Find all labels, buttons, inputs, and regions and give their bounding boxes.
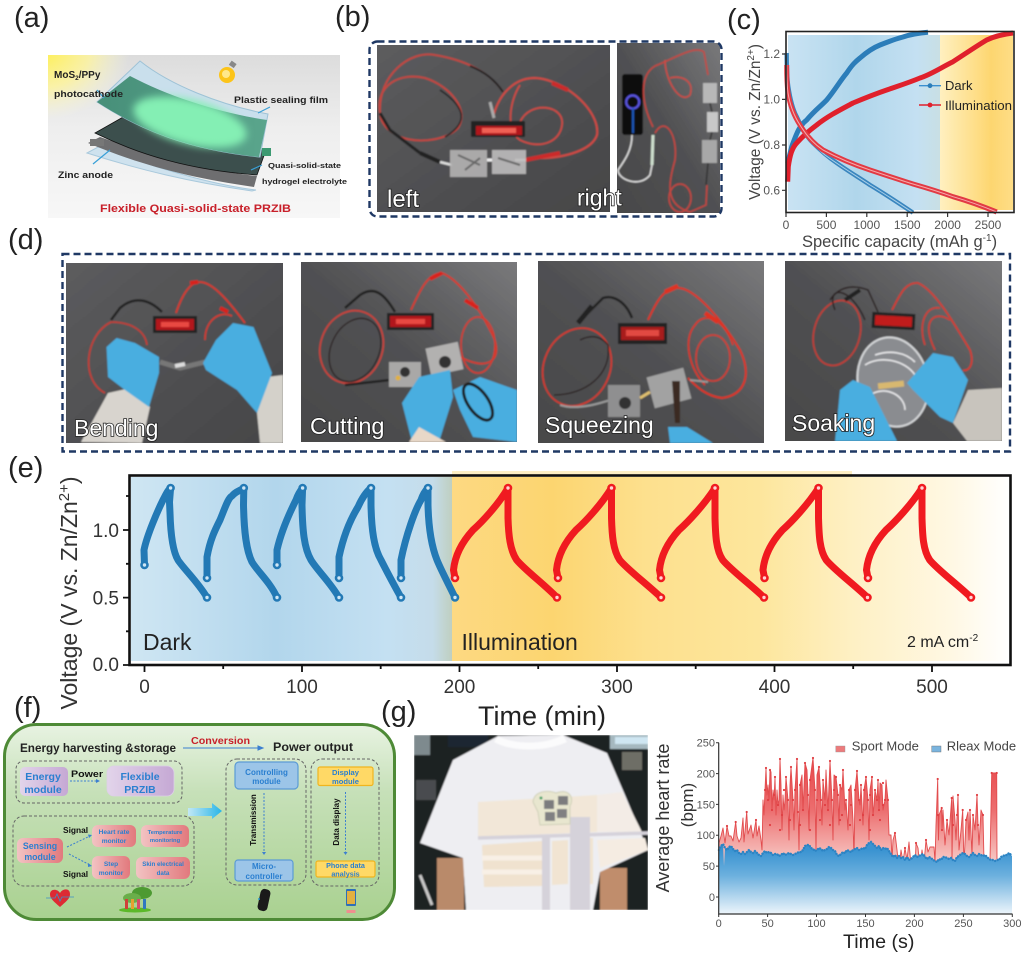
y tick labels: 100 [697,830,715,842]
icon: runners under tree [119,887,152,912]
x ticks: 100 [286,677,318,698]
group: controlling: module [252,777,281,786]
legend: relax mode: Rleax Mode [947,739,1016,754]
axes [719,743,1012,914]
group: display: module [332,777,359,786]
group: energy: Power [71,769,103,780]
group: controlling: controller [246,872,282,881]
legend: dark: Dark [945,78,973,93]
panel d: bending photo [64,261,285,445]
green active region [129,92,250,154]
glove right [907,353,968,423]
x ticks [783,213,1002,232]
glove right [453,377,517,442]
legend: illumination: Illumination [945,98,1012,113]
outer container [4,724,394,920]
x tick labels: 0 [716,918,722,930]
x ticks: 200 [444,677,475,698]
relax mode area [719,842,1012,914]
y axis title: 2+ [746,49,757,61]
x ticks [139,665,948,698]
panel g: wearer photo [414,735,648,910]
arms [437,858,464,910]
x axis title: ) [992,233,997,251]
relax mode line with points [719,842,1012,862]
y ticks: 0.5 [93,588,119,610]
y ticks: 1.0 [93,521,119,542]
group: sensing: Signal [63,869,88,879]
background lab [414,735,430,755]
group: energy: Energy [25,771,61,783]
group: sensing: Step [104,861,118,868]
x ticks: 2000 [934,218,961,232]
dark markers [142,485,458,600]
y tick labels: 250 [697,738,715,750]
glass dish [849,331,937,433]
group: sensing: Signal [63,825,88,835]
x ticks: 0 [139,677,150,698]
y axis title line 2: (bpm) [678,783,697,827]
battery pieces [389,362,421,387]
panel e label: (e) [8,452,43,484]
zinc tab [90,139,104,146]
y tick labels: 150 [697,800,715,812]
panel f label: (f) [14,692,41,724]
LED display [618,323,667,344]
scissors [461,381,495,423]
group: sensing [13,816,194,886]
sun patch lower [482,841,542,887]
label left: left [387,186,419,213]
sport mode points [727,758,997,848]
callout: electrolyte 2: hydrogel electrolyte [262,177,347,186]
panel d: squeezing photo [530,259,766,445]
icon: light bulb [219,61,237,83]
panel g label: (g) [381,696,416,728]
panel c: voltage capacity chart [746,32,1014,251]
label bending: Bending [74,415,158,441]
pliers [672,381,680,423]
group: sensing: Temperature [148,830,183,836]
y ticks: 0.8 [763,138,780,152]
x ticks: 400 [759,677,790,698]
zinc anode layer [88,137,257,187]
sleeve light [597,792,642,832]
caption: device name: Flexible Quasi-solid-state PRZIB [100,203,291,215]
callout: electrolyte 1: Quasi-solid-state [268,161,341,170]
x tick labels: 200 [905,918,924,930]
callout: MoS2/PPy: MoS [54,70,75,81]
y ticks: 1.0 [763,92,780,106]
conversion label: Conversion [191,735,250,747]
callout: MoS2/PPy: 2 [75,75,79,82]
bent battery [160,362,205,368]
wires [578,297,632,323]
group: energy: module [24,784,62,796]
illumination cycles [454,488,971,598]
y tick labels: 50 [703,861,715,873]
legend: dark [919,78,973,93]
panel d: dashed frame [62,254,1010,452]
y axis title: 2+ [56,484,73,501]
glove left [402,370,453,442]
label right: right [577,184,622,210]
group: display: analysis [331,870,360,878]
sport mode area [719,758,997,880]
panel b: dashed frame [370,42,722,216]
x tick labels: 150 [856,918,875,930]
panel b: left photo [375,43,612,214]
group: sensing: monitoring [150,838,181,844]
group: controlling: Transmission [249,794,258,846]
frame [130,476,1010,665]
LED display [471,121,525,137]
wires [111,300,162,320]
panel a label: (a) [14,2,49,34]
LED display [387,313,434,330]
group: display: Phone data [326,861,366,870]
group: energy [16,761,182,803]
x tick labels: 50 [761,918,774,930]
green photocathode layer [97,76,267,157]
zone label dark: Dark [143,629,192,655]
heading output: Power output [273,740,353,754]
t-shirt [420,735,648,910]
group: sensing: monitor [99,870,124,877]
y ticks: 0.6 [763,184,780,198]
panel a: device schematic [40,50,347,218]
sun patch upper [478,795,597,837]
panel b label: (b) [335,1,370,33]
curve: dark discharge [787,53,913,213]
label cutting: Cutting [310,413,384,439]
label soaking: Soaking [792,410,875,436]
sleeve [953,388,1002,441]
frame [786,32,1014,212]
group: controlling: Controlling [245,768,288,777]
callout: plastic film: Plastic sealing film [234,95,328,105]
plastic sealing film top [97,61,268,157]
LED display [153,316,197,333]
legend: sport mode: Sport Mode [852,739,919,754]
icon: smart band [257,888,271,912]
y axis title: Voltage (V vs. Zn/Zn [56,501,82,710]
bottom film layer [87,146,256,191]
illumination markers [452,485,974,600]
cables [618,135,653,182]
group: display [311,759,379,886]
y ticks: 1.2 [763,47,780,61]
label squeezing: Squeezing [545,412,654,438]
wires [892,283,972,370]
battery stack [703,83,717,103]
glove left [106,338,159,407]
y ticks [763,47,786,198]
green tab [262,148,271,156]
callout: zinc anode: Zinc anode [58,170,113,180]
x tick labels: 100 [807,918,826,930]
group: sensing: data [157,870,170,877]
y ticks [93,496,129,676]
x tick labels: 300 [1003,918,1021,930]
group: controlling [226,759,306,885]
panel e: cycling chart [56,471,1010,731]
y axis title line 1: Average heart rate [653,744,673,892]
panel d label: (d) [8,224,43,256]
collar [494,735,567,750]
y axis title: ) [56,476,82,484]
sleeve right [257,375,283,443]
x ticks: 1000 [853,218,880,232]
panel d: cutting photo [299,260,519,444]
x axis title: Specific capacity (mAh g [802,233,983,251]
x tick labels [716,914,1021,930]
group: sensing: monitor [102,838,127,845]
leader lines [93,90,270,170]
glove [668,427,713,443]
conversion arrow [183,746,263,750]
x ticks: 2500 [975,218,1002,232]
group: display: Display [332,768,360,777]
glove left [835,380,897,441]
hydrogel electrolyte layer [95,116,266,175]
icon: phone [346,889,356,913]
panel b: right photo [615,41,722,215]
battery units [450,150,487,177]
glove right [203,323,272,413]
dark zone [788,35,940,210]
curve: illumination discharge [787,65,997,212]
x ticks: 0 [783,218,790,232]
y axis title: ) [747,44,764,49]
schematic artwork [40,50,340,218]
x axis title: -1 [983,233,992,244]
dark cycles [144,488,455,598]
y ticks: 0.0 [93,655,119,676]
y axis title: Voltage (V vs. Zn/Zn [747,61,764,200]
y tick labels: 200 [697,768,715,780]
wearable device [533,791,572,825]
wires [379,52,482,112]
group: sensing: Sensing [23,841,57,851]
group: energy: Flexible [120,771,160,783]
callout: photocathode: photocathode [54,89,123,99]
zone label illumination: Illumination [462,629,578,655]
panel g: heart rate chart [653,738,1021,953]
x ticks: 300 [601,677,633,698]
heading harvest: Energy harvesting &storage [20,743,176,755]
curve: illumination charge [788,33,1013,182]
y tick labels: 0 [709,892,715,904]
battery units [608,385,640,417]
x axis title: Time (s) [843,931,914,953]
cyan arrow [188,803,222,819]
group: display: Data display [332,798,341,846]
current density: -2 [969,633,979,644]
shadow window frame [542,817,590,910]
group: energy: PRZIB [124,784,156,796]
yellow glow above frame [452,471,852,477]
x axis title: Time (min) [478,701,606,731]
group: sensing: Skin electrical [142,861,184,868]
zones [131,477,1009,661]
x tick labels: 250 [954,918,973,930]
phone ring [626,96,639,108]
icon: heart [46,889,74,907]
current density: 2 mA cm [907,634,969,651]
x ticks: 1500 [894,218,921,232]
x ticks: 500 [816,218,837,232]
wrist [409,427,446,442]
panel f: system diagram [4,724,394,920]
phone [622,74,643,135]
light zone [940,35,1013,210]
callout: MoS2/PPy: /PPy [79,70,101,81]
wires [345,291,395,312]
group: controlling: Micro- [252,862,276,871]
LED display [872,312,915,330]
y tick labels [697,738,719,904]
sleeve left [81,387,150,443]
x ticks: 500 [916,677,948,698]
group: sensing: Heart rate [99,829,130,836]
panel c label: (c) [727,4,761,36]
curve: dark charge [788,32,928,163]
panel d: soaking photo [783,259,1004,443]
group: sensing: module [24,852,56,862]
